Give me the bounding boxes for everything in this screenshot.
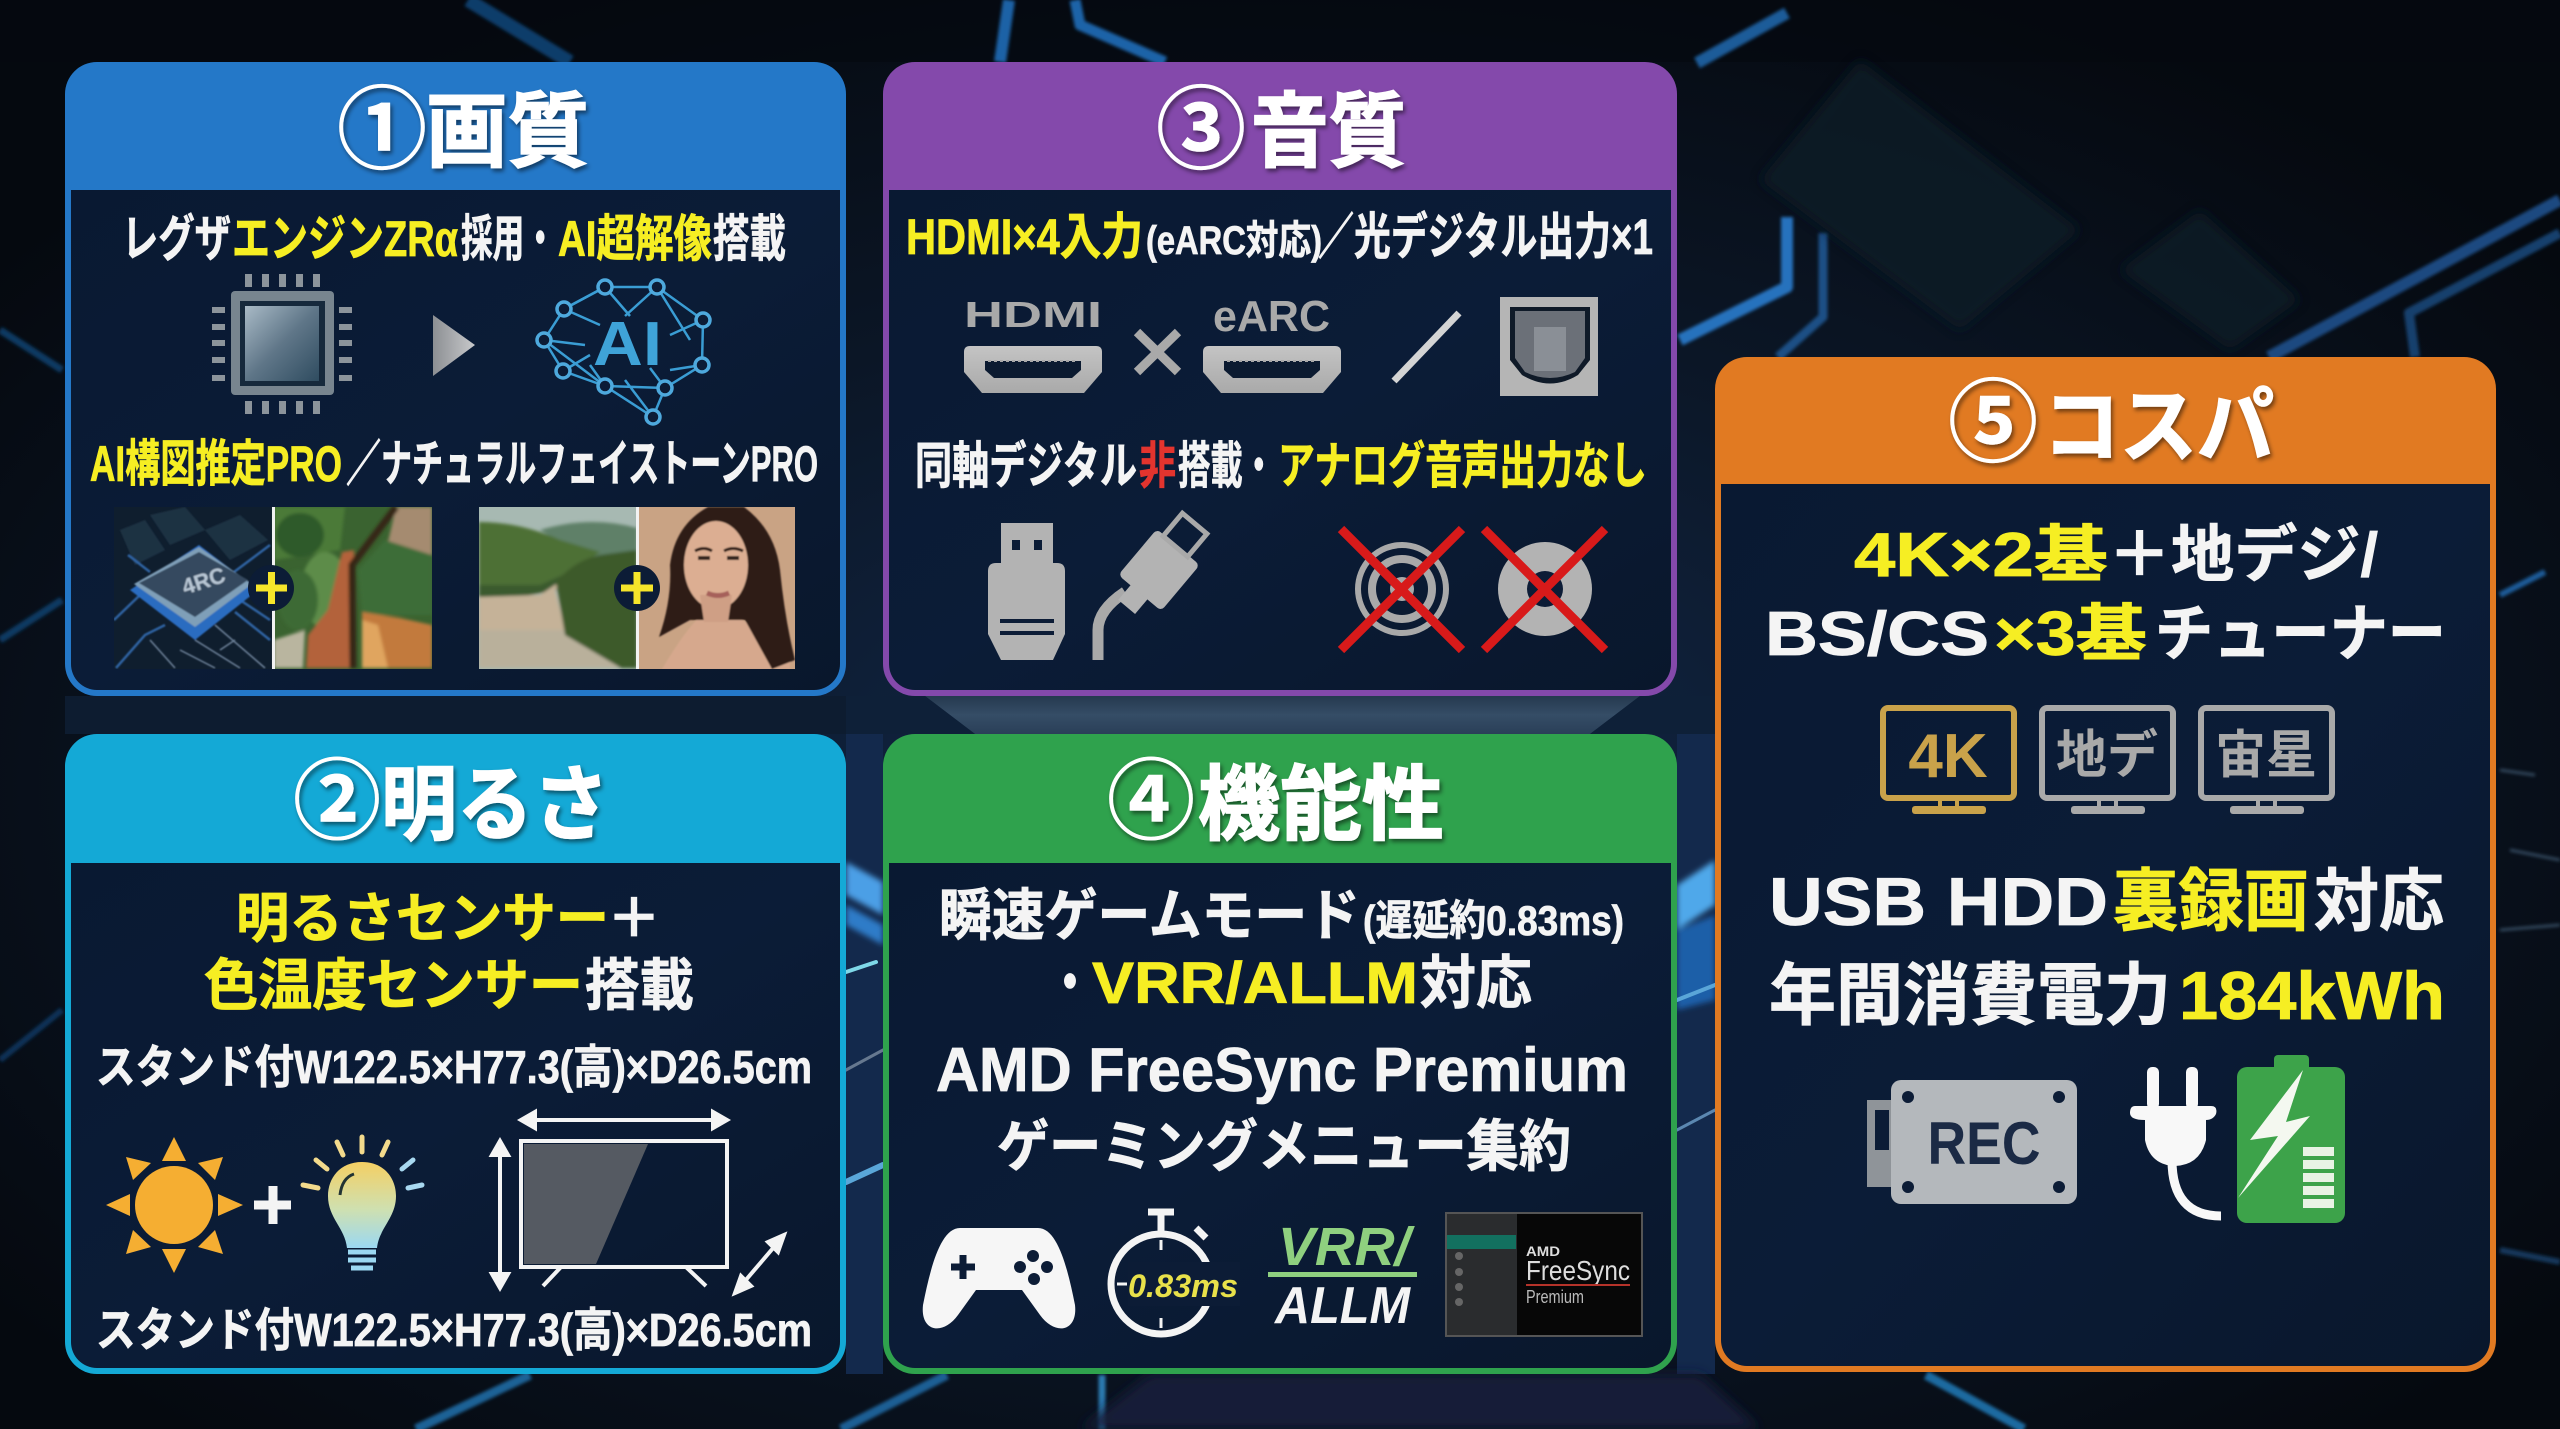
icon: terrestrial digital monitor [2042,708,2173,814]
text: engine and AI super resolution: レグザ [122,211,231,267]
text: HDMI inputs and optical output: 光デジタル出力×1 [1354,209,1653,265]
text: VRR ALLM support: ・ [1048,951,1092,1016]
panel: ③ sound quality [883,62,1677,696]
icon: HDMI port: HDMI [964,294,1102,335]
icon: processor chip [212,274,352,414]
image: FreeSync game menu screen: AMD [1526,1243,1560,1259]
icon: HDD REC: REC [1928,1110,2040,1177]
text: brightness sensor: 明るさセンサー [236,889,609,949]
text: AMD FreeSync Premium: AMD FreeSync Premium [936,1036,1628,1105]
icon: coaxial cable plug [1098,513,1207,660]
text: composition estimation and natural face tone: ナチュラルフェイストーンPRO [381,436,818,492]
text: HDMI inputs and optical output: ／ [1318,209,1354,265]
text: brightness sensor: ＋ [607,889,661,949]
image: landscape and portrait [479,507,795,669]
image: FreeSync game menu screen: Premium [1526,1287,1584,1307]
heading: ④機能性: 機能性 [1198,760,1444,851]
text: engine and AI super resolution: エンジンZRα [232,211,458,267]
heading: ①画質: 画質 [426,87,589,178]
text: no coaxial digital or analog audio output: 搭載・ [1178,438,1275,494]
icon: RCA jack crossed out [1484,529,1605,650]
text: HDMI inputs and optical output [906,209,1653,265]
text: HDMI inputs and optical output: (eARC対応) [1146,219,1322,263]
image: chip and forest [114,507,432,669]
arrow: chip to AI [433,315,475,376]
text: composition estimation and natural face tone [90,436,818,492]
icon: VRR / ALLM [1268,1217,1417,1335]
icon: plus [254,1186,291,1224]
icon: 4K monitor [1883,708,2014,814]
text: BS CS tuners: BS/CS [1765,600,1989,669]
icon: stopwatch 0.83ms: 0.83ms [1128,1268,1238,1304]
text: 4K tuners: ＋地デジ/ [2108,521,2378,590]
icon: HDD REC [1867,1080,2077,1204]
text: dimensions bottom: スタンド付W122.5×H77.3(高)×D26.5cm [96,1304,812,1356]
icon: optical port [1500,297,1598,396]
heading: ⑤コスパ [1948,374,2274,474]
icon: terrestrial digital monitor: 地デ [2056,727,2158,785]
image: FreeSync game menu screen: FreeSync [1526,1255,1630,1286]
text: USB HDD recording: 裏録画 [2113,864,2309,940]
text: color temperature sensor: 色温度センサー [204,954,583,1017]
icon: eARC port: eARC [1213,292,1330,341]
text: no coaxial digital or analog audio output: アナログ音声出力なし [1278,438,1647,494]
text: VRR ALLM support [1048,951,1532,1016]
panel: ⑤ cost performance [1715,357,2496,1372]
heading: ③音質: ③ [1156,81,1246,181]
text: annual power consumption [1769,958,2445,1034]
icon: VRR / ALLM: ALLM [1273,1277,1412,1335]
text: 4K tuners [1854,521,2378,590]
icon: multiply sign [1137,332,1178,372]
heading: ②明るさ [293,752,609,851]
heading: ④機能性: ④ [1107,752,1195,851]
text: no coaxial digital or analog audio output [915,438,1647,494]
text: BS CS tuners: ×3基 [1994,600,2147,669]
text: no coaxial digital or analog audio output: 非 [1139,438,1176,494]
icon: HDMI port [964,294,1102,393]
icon: AI neural network: AI [593,310,662,379]
text: engine and AI super resolution: 採用・ [461,211,556,267]
text: USB HDD recording [1769,864,2444,940]
image: chip and forest: 4RC [179,562,229,600]
text: engine and AI super resolution: AI超解像 [558,211,712,267]
text: color temperature sensor: 搭載 [585,954,694,1017]
icon: light bulb [303,1137,422,1268]
text: gaming menu: ゲーミングメニュー集約 [997,1115,1571,1178]
text: instant game mode [939,884,1624,947]
text: HDMI inputs and optical output: HDMI×4入力 [906,209,1143,265]
heading: ②明るさ: 明るさ [381,760,609,851]
icon: USB plug [988,523,1065,660]
icon: TV with dimension arrows [492,1112,784,1293]
heading: ④機能性 [1107,752,1444,851]
icon: satellite monitor: 宙星 [2215,727,2317,785]
icon: sun [106,1137,243,1273]
panel: ④ functionality [883,734,1677,1374]
image: FreeSync game menu screen [1446,1213,1642,1336]
heading: ③音質 [1156,81,1406,181]
icon: satellite monitor [2201,708,2332,814]
text: annual power consumption: 184kWh [2179,958,2445,1034]
heading: ①画質 [337,81,589,181]
heading: ③音質: 音質 [1251,87,1406,178]
text: no coaxial digital or analog audio output: 同軸デジタル [915,438,1137,494]
heading: ⑤コスパ: ⑤ [1948,374,2038,474]
icon: slash [1394,313,1459,381]
icon: battery charging [2237,1055,2345,1223]
text: VRR ALLM support: 対応 [1420,951,1532,1016]
icon: AI neural network [537,280,710,424]
text: instant game mode: (遅延約0.83ms) [1363,897,1624,944]
heading: ②明るさ: ② [293,752,381,851]
icon: stopwatch 0.83ms [1111,1212,1240,1334]
panel: ② brightness [65,734,846,1374]
icon: game controller [923,1228,1075,1328]
heading: ①画質: ① [337,81,427,181]
icon: 4K monitor: 4K [1908,722,1988,791]
text: annual power consumption: 年間消費電力 [1769,958,2171,1034]
text: BS CS tuners: チューナー [2155,600,2446,669]
text: composition estimation and natural face tone: AI構図推定PRO [90,436,342,492]
icon: eARC port [1203,292,1341,393]
text: USB HDD recording: 対応 [2314,864,2444,940]
heading: ⑤コスパ: コスパ [2043,382,2274,473]
text: BS CS tuners [1765,600,2446,669]
text: 4K tuners: 4K×2基 [1854,521,2108,590]
text: USB HDD recording: USB HDD [1769,864,2108,940]
text: engine and AI super resolution: 搭載 [713,211,786,267]
text: engine and AI super resolution [122,211,786,267]
text: composition estimation and natural face tone: ／ [346,436,381,492]
icon: VRR / ALLM: VRR/ [1278,1217,1415,1277]
text: VRR ALLM support: VRR/ALLM [1092,951,1418,1016]
panel: ① picture quality [65,62,846,696]
icon: analog jack crossed out [1341,529,1462,650]
icon: power plug [2130,1067,2221,1216]
text: dimensions top: スタンド付W122.5×H77.3(高)×D26.5cm [96,1041,812,1093]
text: instant game mode: 瞬速ゲームモード [939,884,1360,947]
